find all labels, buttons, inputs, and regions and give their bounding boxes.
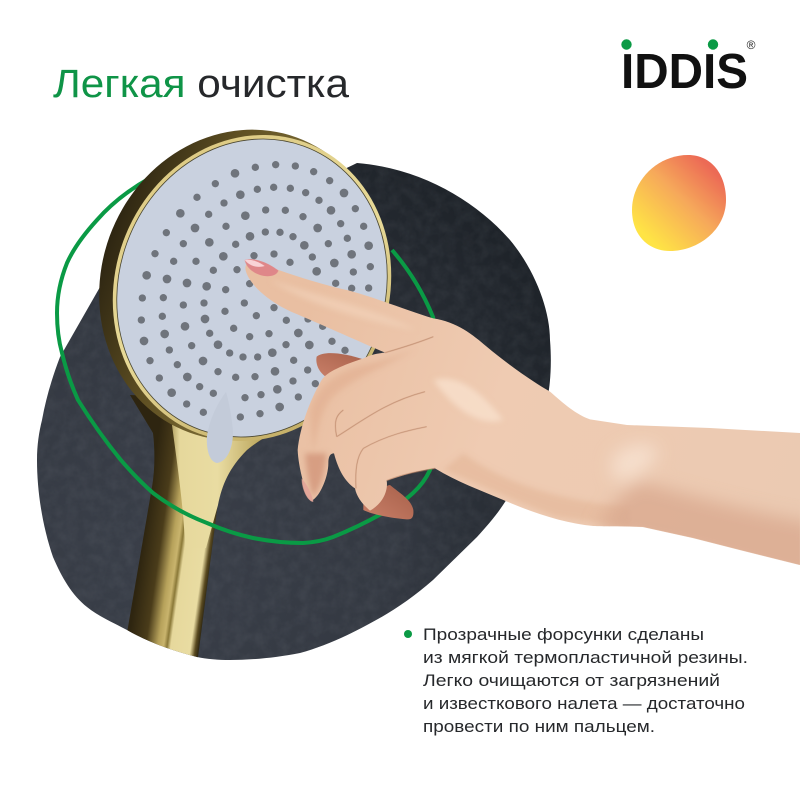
head: gold rim — [70, 95, 434, 481]
text lines: Легко очищаются от загрязнений — [423, 671, 720, 690]
hand and forearm silhouette — [245, 261, 800, 565]
logo: IDDIS: ® — [747, 38, 756, 52]
hand: finger creases — [335, 337, 435, 488]
title: Легкая очистка — [53, 62, 349, 106]
bullet — [404, 630, 412, 638]
text lines — [423, 625, 748, 736]
hand: soft shading — [286, 287, 800, 565]
logo: IDDIS: IDDIS — [621, 45, 748, 99]
head: back shell — [56, 89, 430, 481]
hand: index fingernail — [245, 259, 278, 276]
text lines: провести по ним пальцем. — [423, 717, 655, 736]
head: spray plate — [75, 101, 429, 475]
head: nozzles — [138, 161, 374, 421]
handle: bright neck — [172, 425, 262, 548]
shower head — [56, 89, 434, 481]
hand: tucked thumb — [316, 353, 372, 377]
shower handle — [128, 395, 262, 658]
description text — [404, 625, 748, 736]
hand: curled fingertip — [363, 485, 413, 519]
hand — [245, 259, 800, 583]
head: mode switch tab — [207, 392, 233, 463]
forearm: shadow band and highlight — [598, 441, 800, 565]
green outline ring — [57, 178, 440, 543]
text lines: и известкового налета — достаточно — [423, 694, 745, 713]
dark slate blob — [20, 150, 560, 670]
hand: middle fingernail — [302, 478, 313, 502]
text lines: Прозрачные форсунки сделаны — [423, 625, 704, 644]
decorative gradient blob — [632, 155, 726, 251]
text lines: из мягкой термопластичной резины. — [423, 648, 748, 667]
hand: nail highlight — [245, 260, 265, 267]
